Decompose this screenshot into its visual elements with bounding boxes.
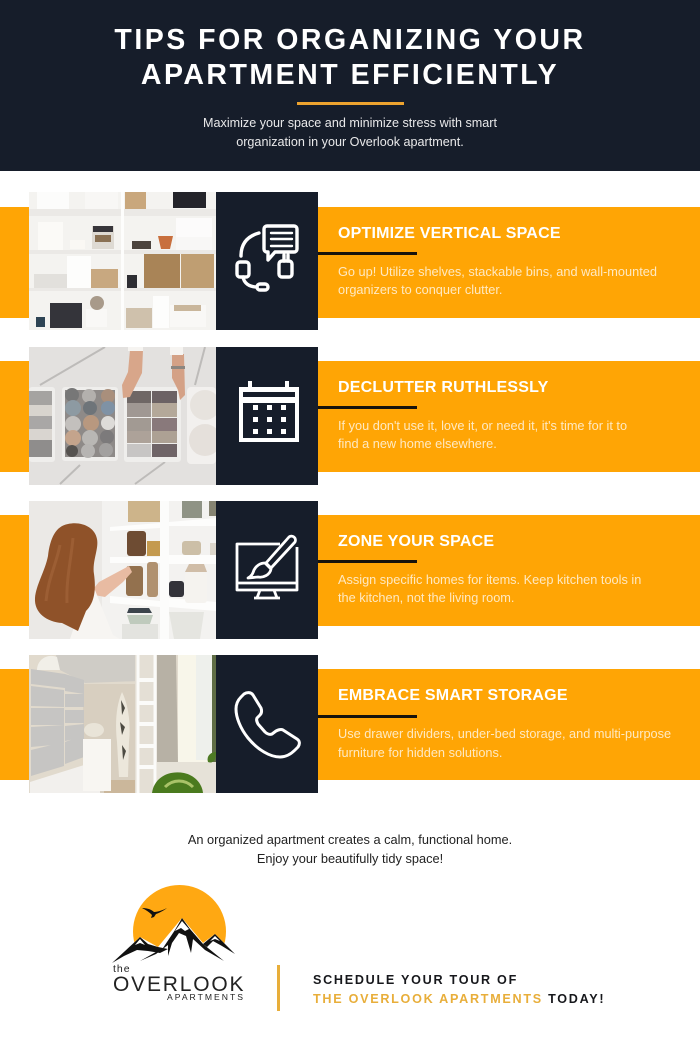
description 1: Go up! Utilize shelves, stackable bins, and wall-mounted — [338, 264, 657, 278]
closing text: Enjoy your beautifully tidy space! — [257, 850, 443, 866]
title — [114, 24, 586, 91]
description 1: organizers to conquer clutter. — [338, 282, 502, 297]
description 3: Assign specific homes for items. Keep kitchen tools in — [338, 572, 641, 586]
connector line 1 — [318, 252, 417, 255]
heading 2: DECLUTTER RUTHLESSLY — [338, 379, 549, 396]
closing text: An organized apartment creates a calm, functional home. — [188, 832, 512, 847]
description 2 — [338, 418, 627, 451]
subtitle: Maximize your space and minimize stress with smart — [203, 116, 497, 130]
footer divider — [277, 965, 280, 1011]
call to action: SCHEDULE YOUR TOUR OF — [313, 973, 518, 987]
connector line 4 — [318, 715, 417, 718]
orange band 4 — [0, 669, 700, 780]
dark icon panel 4 — [216, 655, 318, 793]
description 1 — [338, 264, 657, 297]
photo: storage bins and ladder — [29, 655, 216, 793]
subtitle: organization in your Overlook apartment. — [236, 135, 464, 149]
description 4: Use drawer dividers, under-bed storage, and multi-purpose — [338, 726, 671, 741]
icon: calendar — [239, 381, 299, 442]
dark icon panel 3 — [216, 501, 318, 639]
description 3: the kitchen, not the living room. — [338, 590, 514, 605]
icon: monitor with paintbrush — [236, 534, 298, 600]
call to action — [313, 973, 605, 1006]
connector line 2 — [318, 406, 417, 409]
subtitle — [203, 116, 497, 149]
orange band 1 — [0, 207, 700, 318]
title accent line — [297, 102, 404, 105]
description 3 — [338, 572, 641, 605]
icon: headset with chat bubble — [235, 224, 299, 292]
dark icon panel 1 — [216, 192, 318, 330]
orange band 3 — [0, 515, 700, 626]
description 2: find a new home elsewhere. — [338, 436, 497, 451]
orange band 2 — [0, 361, 700, 472]
heading 4: EMBRACE SMART STORAGE — [338, 687, 568, 704]
closing text — [188, 832, 512, 866]
logo: The Overlook Apartments — [112, 885, 245, 1002]
icon: phone handset — [234, 691, 301, 758]
title: APARTMENT EFFICIENTLY — [141, 59, 559, 91]
description 2: If you don't use it, love it, or need it, it's time for it to — [338, 418, 627, 432]
title: TIPS FOR ORGANIZING YOUR — [114, 24, 586, 56]
heading 3: ZONE YOUR SPACE — [338, 533, 494, 550]
call to action: THE OVERLOOK APARTMENTS TODAY! — [313, 992, 605, 1006]
logo: The Overlook Apartments: APARTMENTS — [167, 992, 245, 1002]
description 4: furniture for hidden solutions. — [338, 744, 502, 760]
photo: drawer organizers on marble — [29, 347, 216, 485]
logo: The Overlook Apartments: OVERLOOK — [113, 973, 245, 996]
logo: The Overlook Apartments: the — [113, 963, 131, 975]
photo: woman at pantry shelves — [29, 501, 216, 639]
description 4 — [338, 726, 671, 760]
photo: white shelves — [29, 192, 216, 330]
connector line 3 — [318, 560, 417, 563]
header panel — [0, 0, 700, 171]
heading 1: OPTIMIZE VERTICAL SPACE — [338, 225, 561, 242]
dark icon panel 2 — [216, 347, 318, 485]
